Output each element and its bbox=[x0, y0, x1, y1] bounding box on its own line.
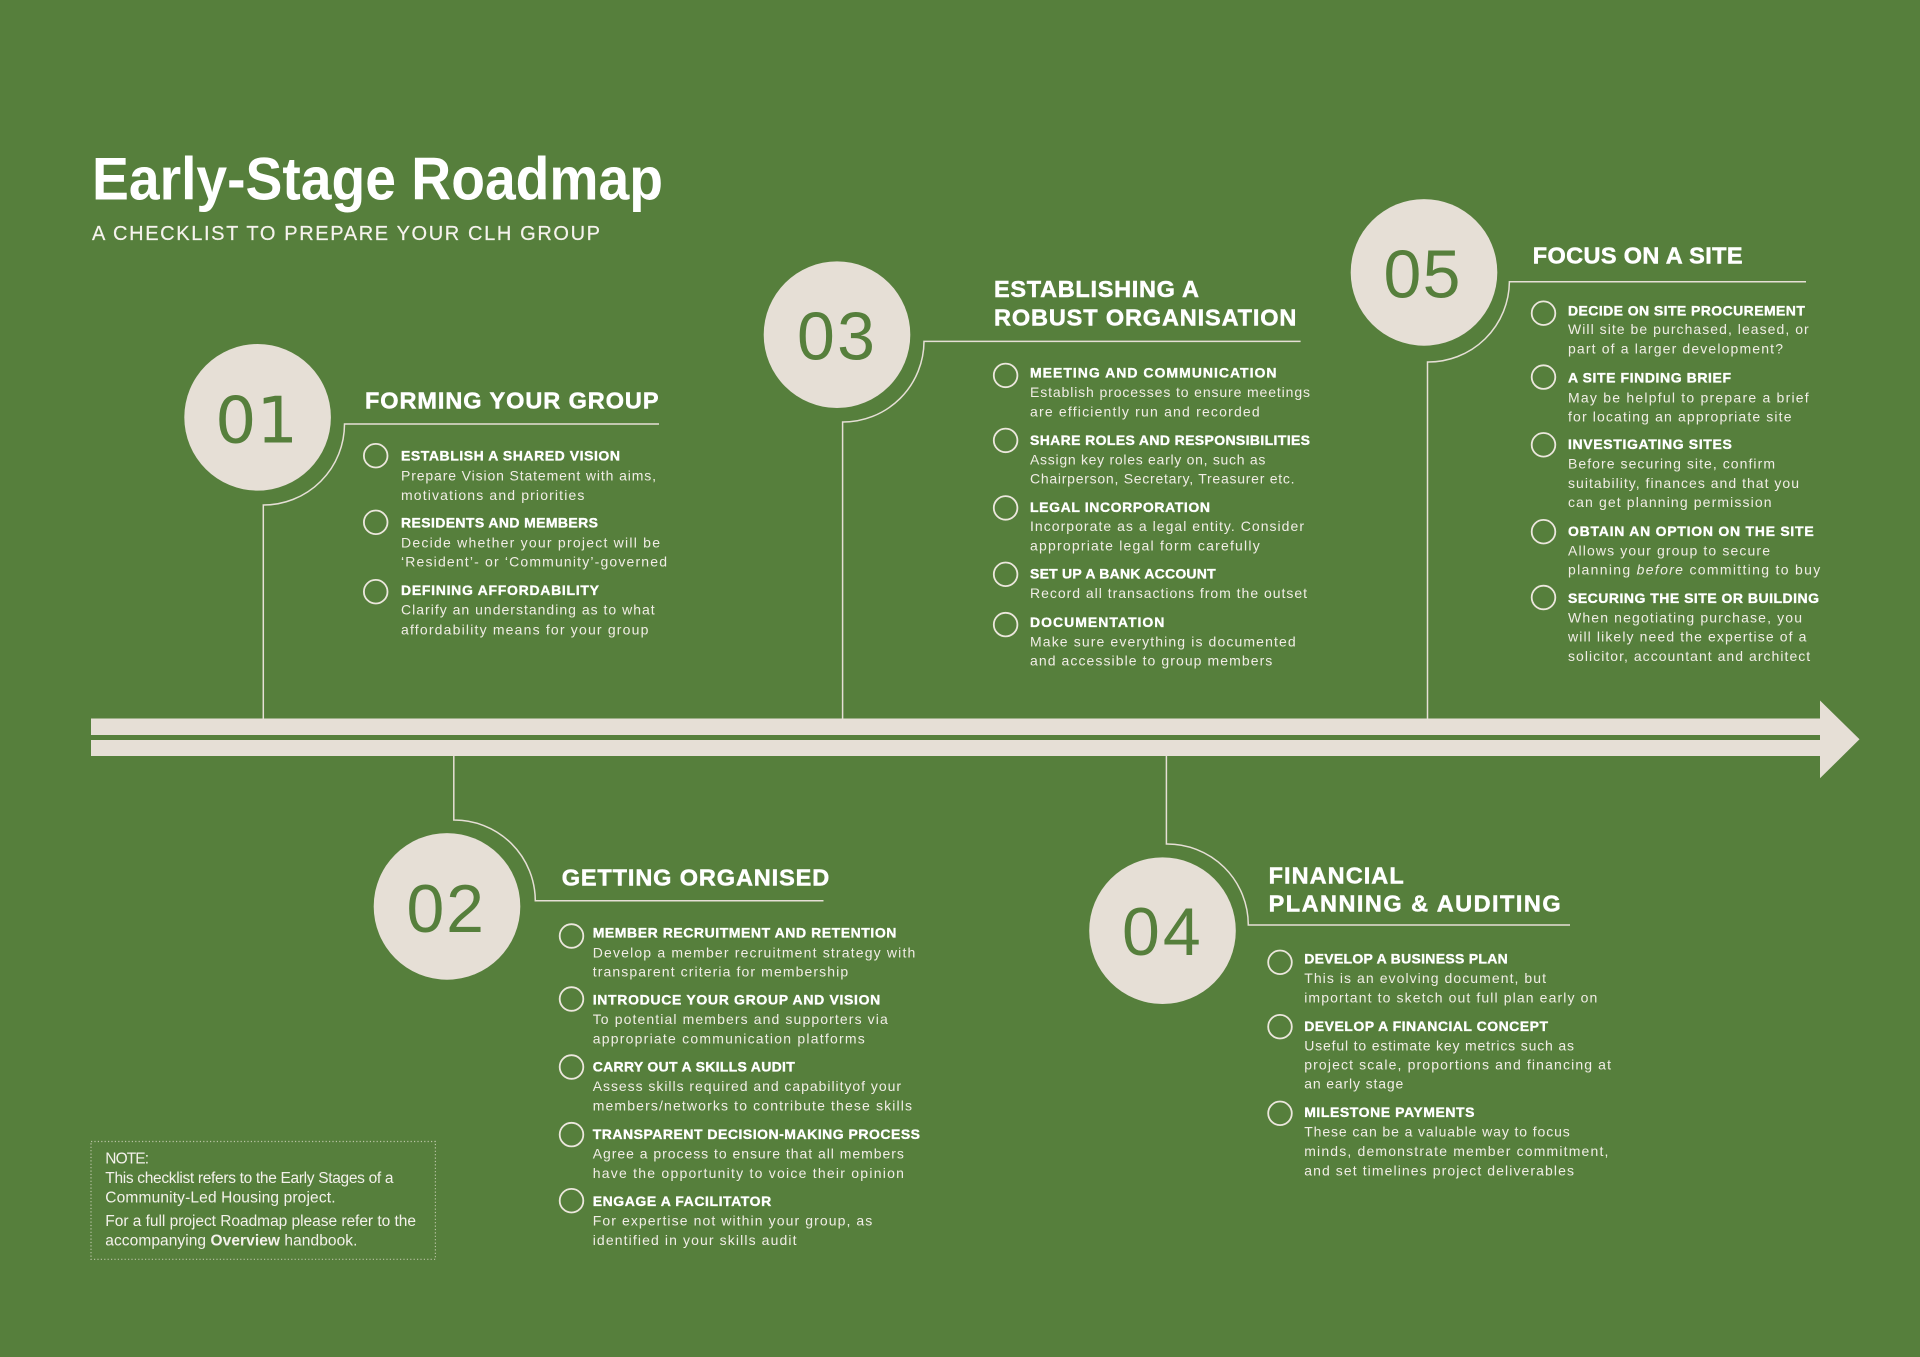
item: obtain an option on the site: OBTAIN AN OPTION ON THE SITE bbox=[1568, 523, 1814, 539]
callout: note box: NOTE: bbox=[105, 1151, 149, 1168]
item: legal incorporation: Incorporate as a legal entity. Consider bbox=[1030, 518, 1304, 534]
item: develop a financial concept: Useful to estimate key metrics such as bbox=[1304, 1037, 1574, 1053]
item: share roles and responsibilities: SHARE ROLES AND RESPONSIBILITIES bbox=[1030, 432, 1310, 448]
number badge 01 bbox=[184, 344, 331, 491]
item: introduce your group and vision: appropriate communication platforms bbox=[593, 1030, 865, 1046]
number badge 01: 01 bbox=[215, 384, 298, 458]
item: a site finding brief bbox=[1532, 365, 1809, 424]
panel: 02 getting organised bbox=[374, 756, 920, 1248]
item: develop a business plan bbox=[1268, 950, 1597, 1005]
number badge 04 bbox=[1089, 857, 1236, 1004]
item: introduce your group and vision: To potential members and supporters via bbox=[593, 1011, 888, 1027]
item: securing the site or building: will likely need the expertise of a bbox=[1567, 628, 1807, 644]
item: engage a facilitator: For expertise not within your group, as bbox=[593, 1212, 872, 1228]
item: securing the site or building bbox=[1532, 586, 1819, 664]
item: decide on site procurement: DECIDE ON SITE PROCUREMENT bbox=[1568, 302, 1805, 318]
item: transparent decision-making process: TRANSPARENT DECISION-MAKING PROCESS bbox=[593, 1126, 920, 1142]
item: introduce your group and vision: INTRODUCE YOUR GROUP AND VISION bbox=[593, 992, 880, 1008]
item: a site finding brief: for locating an appropriate site bbox=[1568, 408, 1792, 424]
connector 04 bbox=[1166, 756, 1570, 925]
connector 05 bbox=[1428, 282, 1806, 719]
timeline arrow bbox=[91, 700, 1860, 778]
item: develop a business plan: important to sketch out full plan early on bbox=[1304, 989, 1597, 1005]
heading 03: ROBUST ORGANISATION bbox=[994, 305, 1296, 331]
panel: 01 forming your group bbox=[184, 344, 667, 719]
item: carry out a skills audit bbox=[560, 1055, 912, 1114]
title: Early-Stage Roadmap bbox=[92, 145, 663, 212]
callout: note box: Community-Led Housing project. bbox=[105, 1190, 336, 1206]
callout: note box: accompanying Overview handbook. bbox=[105, 1232, 357, 1250]
item: member recruitment and retention: MEMBER RECRUITMENT AND RETENTION bbox=[593, 925, 896, 941]
connector 01 bbox=[263, 424, 659, 719]
item: member recruitment and retention: Develop a member recruitment strategy with bbox=[593, 944, 915, 960]
number badge 03: 03 bbox=[797, 299, 875, 375]
item: milestone payments: MILESTONE PAYMENTS bbox=[1304, 1104, 1474, 1120]
item: engage a facilitator: identified in your skills audit bbox=[593, 1232, 797, 1248]
item: documentation: DOCUMENTATION bbox=[1030, 614, 1164, 630]
item: securing the site or building: SECURING THE SITE OR BUILDING bbox=[1568, 590, 1819, 606]
item: decide on site procurement bbox=[1532, 301, 1809, 357]
item: develop a financial concept: DEVELOP A FINANCIAL CONCEPT bbox=[1304, 1018, 1548, 1034]
callout: note box: This checklist refers to the Early Stages of a bbox=[105, 1170, 394, 1187]
item: residents and members: Decide whether your project will be bbox=[401, 534, 660, 550]
heading 02: GETTING ORGANISED bbox=[562, 865, 829, 891]
item: securing the site or building: solicitor, accountant and architect bbox=[1568, 648, 1810, 664]
item: decide on site procurement: part of a larger development? bbox=[1568, 341, 1783, 357]
item: residents and members: RESIDENTS AND MEMBERS bbox=[401, 515, 598, 531]
item: investigating sites: suitability, finances and that you bbox=[1568, 475, 1799, 491]
heading 04 bbox=[1269, 862, 1561, 917]
item: member recruitment and retention: transparent criteria for membership bbox=[593, 964, 848, 980]
item: develop a business plan: DEVELOP A BUSINESS PLAN bbox=[1304, 950, 1508, 966]
item: milestone payments: minds, demonstrate member commitment, bbox=[1304, 1143, 1608, 1159]
item: develop a financial concept bbox=[1268, 1015, 1611, 1091]
item: share roles and responsibilities bbox=[994, 429, 1310, 487]
callout: note box bbox=[91, 1142, 435, 1259]
item: set up a bank account: Record all transactions from the outset bbox=[1030, 585, 1307, 601]
item: carry out a skills audit: members/networks to contribute these skills bbox=[593, 1098, 912, 1114]
item: a site finding brief: May be helpful to prepare a brief bbox=[1568, 389, 1809, 405]
item: documentation: Make sure everything is documented bbox=[1030, 633, 1296, 649]
item: transparent decision-making process: Agree a process to ensure that all members bbox=[593, 1145, 904, 1161]
panel: 03 establishing a robust organisation bbox=[764, 261, 1310, 719]
item: legal incorporation: appropriate legal form carefully bbox=[1030, 537, 1260, 553]
item: defining affordability: Clarify an understanding as to what bbox=[401, 602, 655, 618]
item: develop a business plan: This is an evolving document, but bbox=[1304, 970, 1546, 986]
subtitle: A CHECKLIST TO PREPARE YOUR CLH GROUP bbox=[92, 223, 600, 245]
heading 04: PLANNING & AUDITING bbox=[1269, 891, 1561, 917]
item: establish a shared vision: motivations and priorities bbox=[401, 487, 584, 503]
callout: note box: For a full project Roadmap please refer to the bbox=[105, 1213, 416, 1230]
item: carry out a skills audit: CARRY OUT A SKILLS AUDIT bbox=[593, 1059, 795, 1075]
item: defining affordability bbox=[364, 580, 655, 637]
item: decide on site procurement: Will site be purchased, leased, or bbox=[1568, 321, 1809, 337]
item: engage a facilitator bbox=[560, 1189, 872, 1248]
panel: 04 financial planning and auditing bbox=[1089, 756, 1611, 1178]
item: member recruitment and retention bbox=[560, 924, 915, 980]
item: introduce your group and vision bbox=[560, 987, 888, 1046]
item: obtain an option on the site: planning before committing to buy bbox=[1568, 562, 1820, 578]
connector 03 bbox=[843, 341, 1301, 719]
item: defining affordability: affordability means for your group bbox=[401, 621, 649, 637]
item: meeting and communication bbox=[994, 364, 1310, 419]
number badge 05 bbox=[1351, 199, 1497, 346]
number badge 02 bbox=[374, 833, 520, 980]
item: meeting and communication: Establish processes to ensure meetings bbox=[1030, 384, 1310, 400]
number badge 05: 05 bbox=[1384, 236, 1460, 312]
item: establish a shared vision: Prepare Vision Statement with aims, bbox=[401, 468, 656, 484]
item: milestone payments bbox=[1268, 1102, 1608, 1178]
number badge 04: 04 bbox=[1122, 894, 1201, 970]
item: obtain an option on the site: Allows your group to secure bbox=[1568, 542, 1770, 558]
item: investigating sites: INVESTIGATING SITES bbox=[1568, 436, 1732, 452]
item: legal incorporation: LEGAL INCORPORATION bbox=[1030, 499, 1210, 515]
item: carry out a skills audit: Assess skills required and capabilityof your bbox=[593, 1078, 901, 1094]
item: develop a financial concept: an early stage bbox=[1304, 1075, 1404, 1091]
item: residents and members: ‘Resident’- or ‘Community’-governed bbox=[401, 553, 667, 569]
heading 01: FORMING YOUR GROUP bbox=[365, 388, 658, 414]
number badge 02: 02 bbox=[406, 871, 484, 947]
item: set up a bank account bbox=[994, 562, 1307, 601]
item: meeting and communication: are efficiently run and recorded bbox=[1030, 403, 1260, 419]
item: share roles and responsibilities: Chairperson, Secretary, Treasurer etc. bbox=[1030, 471, 1294, 487]
item: share roles and responsibilities: Assign key roles early on, such as bbox=[1030, 451, 1265, 467]
item: set up a bank account: SET UP A BANK ACCOUNT bbox=[1030, 566, 1216, 582]
item: defining affordability: DEFINING AFFORDABILITY bbox=[401, 582, 600, 598]
panel: 05 focus on a site bbox=[1351, 199, 1820, 719]
number badge 03 bbox=[764, 261, 910, 408]
item: documentation: and accessible to group members bbox=[1030, 653, 1272, 669]
heading 03: ESTABLISHING A bbox=[994, 276, 1199, 302]
item: meeting and communication: MEETING AND COMMUNICATION bbox=[1030, 364, 1276, 380]
item: establish a shared vision: ESTABLISH A SHARED VISION bbox=[401, 448, 620, 464]
item: investigating sites bbox=[1532, 433, 1799, 510]
item: transparent decision-making process bbox=[560, 1123, 920, 1181]
item: transparent decision-making process: have the opportunity to voice their opinion bbox=[593, 1165, 904, 1181]
item: legal incorporation bbox=[994, 496, 1304, 553]
item: a site finding brief: A SITE FINDING BRIEF bbox=[1568, 369, 1731, 385]
item: milestone payments: These can be a valuable way to focus bbox=[1304, 1124, 1570, 1140]
heading 05: FOCUS ON A SITE bbox=[1533, 242, 1742, 268]
connector 02 bbox=[454, 756, 824, 901]
item: establish a shared vision bbox=[364, 444, 656, 503]
item: residents and members bbox=[364, 510, 667, 569]
item: obtain an option on the site bbox=[1532, 520, 1820, 578]
item: securing the site or building: When negotiating purchase, you bbox=[1568, 609, 1802, 625]
heading 04: FINANCIAL bbox=[1269, 862, 1404, 888]
item: engage a facilitator: ENGAGE A FACILITATOR bbox=[593, 1193, 771, 1209]
item: investigating sites: can get planning permission bbox=[1568, 494, 1772, 510]
item: develop a financial concept: project scale, proportions and financing at bbox=[1304, 1057, 1611, 1073]
heading 03 bbox=[994, 276, 1296, 331]
item: milestone payments: and set timelines project deliverables bbox=[1304, 1162, 1574, 1178]
item: documentation bbox=[994, 613, 1296, 669]
item: investigating sites: Before securing site, confirm bbox=[1568, 456, 1775, 472]
